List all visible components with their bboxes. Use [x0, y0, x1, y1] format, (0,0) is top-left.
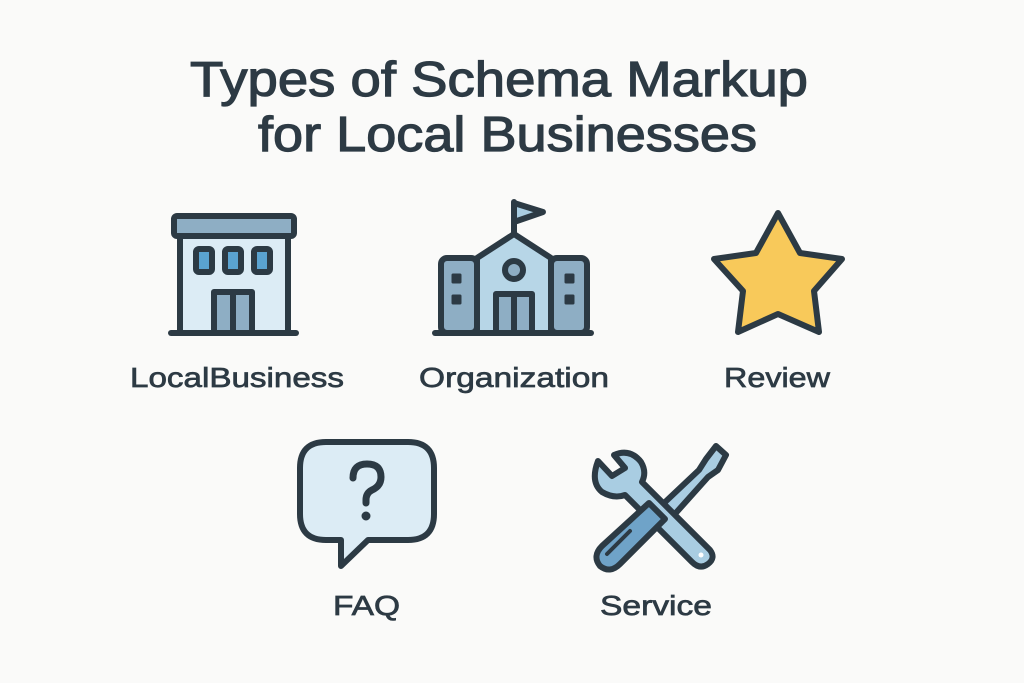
label: FAQ: FAQ [333, 590, 400, 621]
label: Service: Service [600, 590, 712, 621]
title: Types of Schema Markup [190, 53, 808, 107]
label: LocalBusiness: LocalBusiness [130, 362, 344, 393]
icon: tools (wrench and screwdriver) [595, 446, 726, 570]
title: for Local Businesses [258, 108, 757, 162]
icon: organization building [435, 202, 591, 333]
label: Organization: Organization [419, 362, 609, 393]
icon: star [714, 213, 842, 332]
title [190, 53, 808, 162]
label: Review: Review [724, 362, 831, 393]
icon: local business building [171, 216, 296, 333]
icon: FAQ speech bubble [300, 442, 434, 566]
